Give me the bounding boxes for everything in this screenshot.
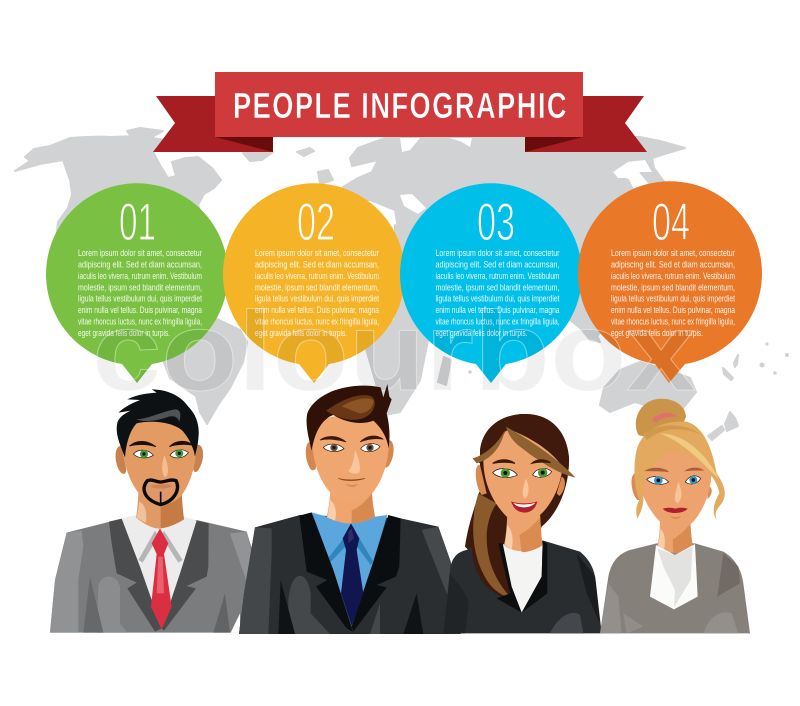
hair fringe (473, 414, 569, 475)
bubble 01 (46, 183, 228, 383)
face (312, 415, 389, 502)
body text 02: vitae rhoncus luctus, nunc ex fringilla ligula, (255, 316, 379, 327)
bubble 04 (578, 181, 762, 383)
number 01: 01 (119, 193, 156, 252)
body text 03: vitae rhoncus luctus, nunc ex fringilla ligula, (436, 316, 560, 327)
body text 03: iaculis leo viverra, rutrum enim. Vestibulum (436, 270, 560, 281)
body text 04: enim nulla vel tellus. Duis pulvinar, magna (611, 304, 736, 315)
hair streak (506, 427, 575, 477)
hair (307, 384, 392, 451)
watermark: colourbox (92, 289, 696, 414)
collar (650, 544, 698, 609)
eyebrows (493, 460, 551, 463)
title: PEOPLE INFOGRAPHIC (233, 85, 568, 126)
lapels (497, 543, 522, 613)
ears (631, 473, 712, 500)
neck (657, 518, 693, 553)
ears (476, 465, 565, 496)
bubble 03 (400, 183, 582, 383)
nose (348, 450, 360, 474)
mouth (511, 501, 537, 513)
body text 03: molestie, ipsum sed blandit elementum, (436, 281, 560, 292)
eyebrows (129, 441, 193, 447)
body text 04: vitae rhoncus luctus, nunc ex fringilla ligula, (611, 316, 735, 327)
ribbon right tail (525, 96, 647, 152)
goatee (144, 480, 177, 505)
tie (341, 523, 363, 626)
eyes (493, 468, 552, 478)
suit (50, 520, 253, 633)
suit (600, 543, 750, 633)
eyes (323, 444, 380, 452)
ribbon right fold (525, 137, 583, 152)
person 1: man with goatee (50, 389, 253, 633)
ribbon main panel (215, 72, 583, 137)
body text 03 (436, 247, 560, 338)
neck (504, 513, 543, 551)
body text 01: vitae rhoncus luctus, nunc ex fringilla ligula, (78, 316, 202, 327)
face (123, 420, 197, 505)
body text 04: Lorem ipsum dolor sit amet, consectetur (611, 247, 735, 258)
body text 01: Lorem ipsum dolor sit amet, consectetur (78, 247, 202, 258)
eyebrows (646, 468, 703, 472)
number 03: 03 (477, 193, 515, 252)
suit shading (443, 573, 469, 633)
neck (136, 488, 184, 529)
body text 02 (255, 247, 380, 338)
face (483, 429, 563, 523)
hair (634, 421, 725, 520)
body text 04 (611, 247, 736, 338)
shirt inner (657, 547, 693, 607)
body text 03: Lorem ipsum dolor sit amet, consectetur (436, 247, 560, 258)
eyes (647, 476, 701, 484)
body text 01: enim nulla vel tellus. Duis pulvinar, magna (78, 304, 203, 315)
number 02: 02 (297, 193, 335, 252)
neck (327, 487, 375, 523)
hair bun (636, 399, 686, 438)
body text 02: enim nulla vel tellus. Duis pulvinar, magna (255, 304, 380, 315)
mouth (663, 508, 688, 513)
suit (443, 541, 602, 633)
person 2: man with blue shirt (239, 384, 461, 634)
body text 01: eget gravida felis dolor in turpis. (78, 327, 170, 338)
body text 01 (78, 247, 203, 338)
hair back (465, 414, 569, 600)
lapels (299, 512, 353, 632)
ears (306, 440, 394, 470)
tie (151, 528, 172, 629)
hair left strand (473, 493, 513, 600)
hair (117, 389, 199, 457)
body text 03: enim nulla vel tellus. Duis pulvinar, magna (436, 304, 560, 315)
ears (116, 445, 203, 474)
hair highlight (136, 409, 180, 422)
body text 04: molestie, ipsum sed blandit elementum, (611, 281, 735, 292)
body text 02: iaculis leo viverra, rutrum enim. Vestibulum (255, 270, 379, 281)
body text 03: eget gravida felis dolor in turpis. (436, 327, 528, 338)
body text 04: iaculis leo viverra, rutrum enim. Vestibulum (611, 270, 735, 281)
body text 02: molestie, ipsum sed blandit elementum, (255, 281, 379, 292)
world map (15, 128, 788, 440)
nose (162, 455, 168, 477)
body text 02: adipiscing elit. Sed et diam accumsan, (255, 258, 379, 269)
body text 01: ligula tellus vestibulum dui, quis imperdiet (78, 293, 202, 304)
shirt (122, 515, 197, 628)
body text 01: molestie, ipsum sed blandit elementum, (78, 281, 202, 292)
body text 04: ligula tellus vestibulum dui, quis imperdiet (611, 293, 735, 304)
hair highlight (326, 395, 375, 420)
ribbon left fold (215, 137, 273, 152)
body text 02: eget gravida felis dolor in turpis. (255, 327, 347, 338)
number 04: 04 (652, 193, 690, 252)
suit shading (50, 531, 83, 633)
body text 02: ligula tellus vestibulum dui, quis imperdiet (255, 293, 379, 304)
lapels (109, 519, 162, 632)
suit shading (600, 583, 622, 633)
body text 04: adipiscing elit. Sed et diam accumsan, (611, 258, 735, 269)
body text 03: adipiscing elit. Sed et diam accumsan, (436, 258, 560, 269)
shirt (503, 544, 543, 613)
face (638, 445, 712, 529)
shirt (312, 512, 387, 627)
person 4: blonde woman (600, 399, 750, 633)
suit (239, 515, 461, 634)
eyebrows (320, 436, 383, 442)
nose (523, 478, 529, 498)
nose (675, 482, 681, 503)
ribbon banner (153, 72, 647, 152)
suit shading (239, 527, 272, 634)
ribbon left tail (153, 96, 273, 152)
hair highlight (660, 433, 718, 478)
body text 03: ligula tellus vestibulum dui, quis imperdiet (436, 293, 560, 304)
body text 01: iaculis leo viverra, rutrum enim. Vestibulum (78, 270, 202, 281)
white seas on map (400, 138, 652, 214)
body text 02: Lorem ipsum dolor sit amet, consectetur (255, 247, 379, 258)
body text 04: eget gravida felis dolor in turpis. (611, 327, 703, 338)
bubble 02 (223, 183, 405, 383)
person 3: woman with long brown hair (443, 414, 602, 633)
mouth (338, 478, 365, 481)
eyes (133, 450, 188, 458)
body text 01: adipiscing elit. Sed et diam accumsan, (78, 258, 202, 269)
